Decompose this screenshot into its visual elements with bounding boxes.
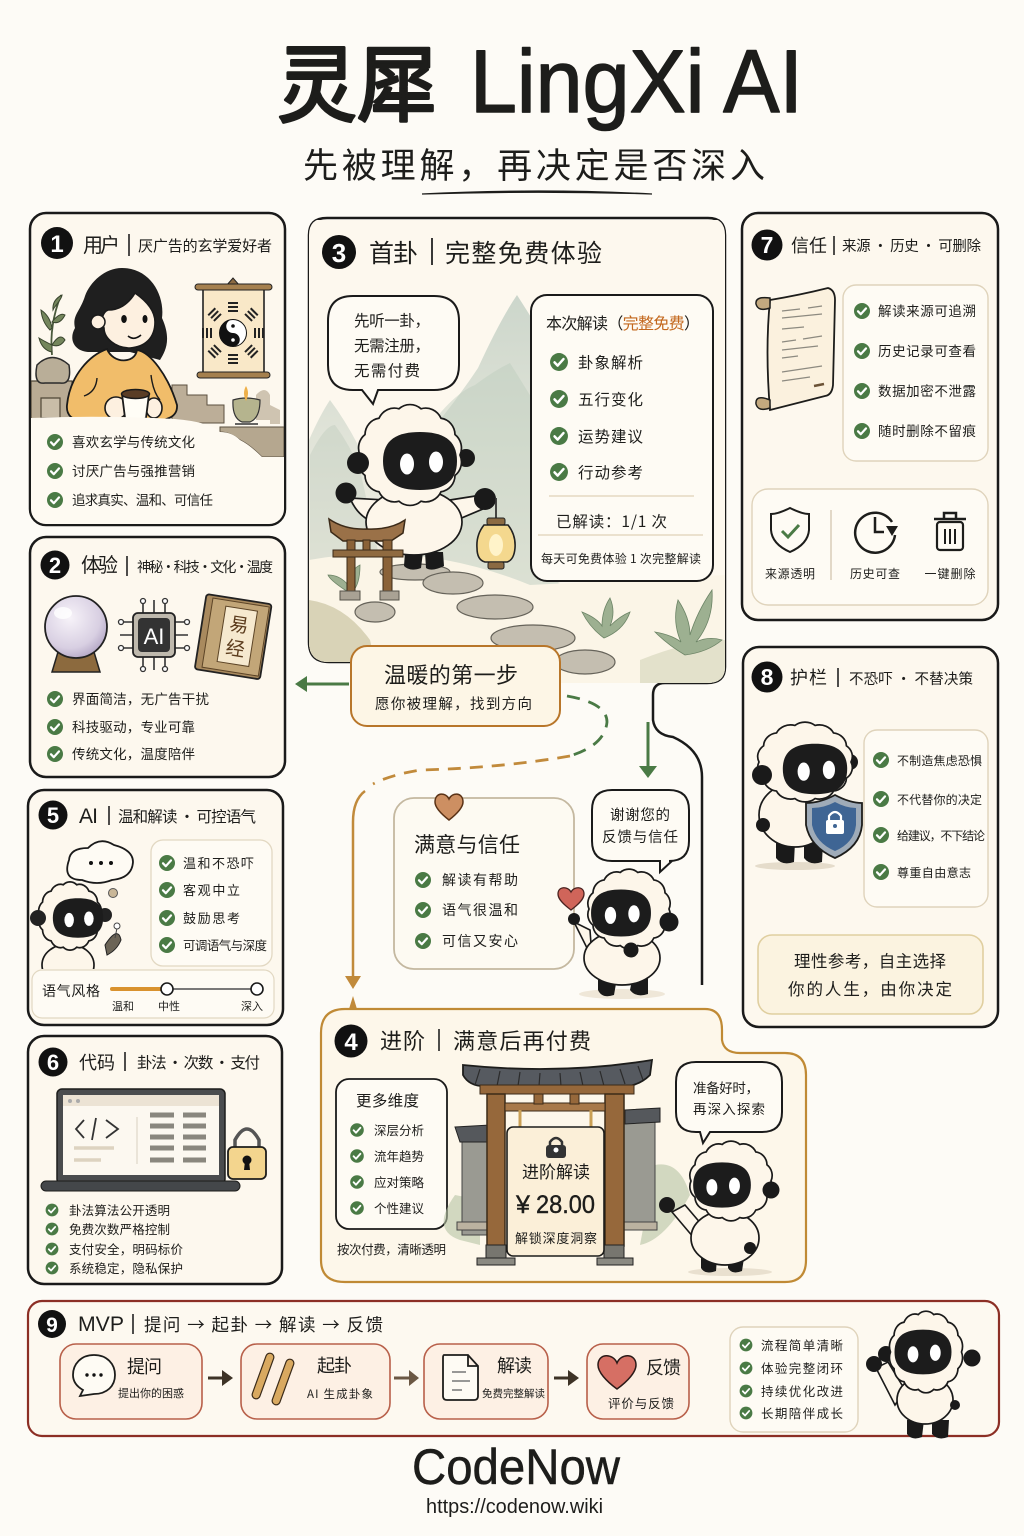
heading: panel 3 (322, 234, 602, 270)
heading: panel 1 (41, 227, 272, 259)
box: tone list: 温和不恐吓 (183, 853, 254, 872)
info panel: this reading: 卦象解析 (578, 351, 643, 373)
list: code: 免费次数严格控制 (69, 1219, 170, 1238)
title: 灵犀 (277, 19, 437, 140)
scene: mountains and stones (309, 220, 725, 683)
heading: panel 3: 首卦 (369, 234, 418, 270)
speech bubble (328, 296, 459, 404)
icon: document scroll (756, 288, 835, 410)
heading: panel 6: 卦法 · 次数 · 支付 (137, 1051, 260, 1073)
lantern (477, 498, 515, 569)
step: ask (60, 1344, 202, 1419)
heading: panel 7: 7 (761, 232, 773, 258)
step: read: 解读 (497, 1352, 532, 1378)
heading: panel 2: 2 (49, 553, 61, 578)
sweater (67, 349, 177, 421)
illustration: gate with price sign: ¥ (515, 1191, 530, 1219)
box: tone list: 鼓励思考 (183, 908, 240, 927)
box: guardrail list: 不代替你的决定 (897, 791, 982, 808)
heading: panel 8: 不恐吓 · 不替决策 (849, 668, 974, 689)
box: trust list (843, 285, 988, 461)
speech bubble: thanks (592, 790, 689, 872)
list: user traits: 追求真实、温和、可信任 (72, 489, 213, 509)
sheep mascot waving (659, 1141, 780, 1276)
box: MVP checklist (730, 1327, 858, 1432)
illustration: woman with tea (31, 268, 284, 525)
heading: panel 4: 进阶 (380, 1024, 425, 1056)
icon: yi jing book: 易 (228, 609, 251, 639)
box: tone list (151, 840, 272, 966)
step: divine (241, 1344, 390, 1419)
box: more dimensions: 流年趋势 (374, 1146, 424, 1165)
tone slider: 温和 (112, 998, 134, 1014)
heading: panel 2: 神秘·科技·文化·温度 (137, 557, 273, 577)
icon: AI chip (118, 598, 190, 672)
heading: panel 1: 用户 (83, 229, 120, 258)
panel 4: advanced (321, 1009, 806, 1282)
step: feedback: 评价与反馈 (608, 1393, 674, 1412)
footer brand (412, 1439, 621, 1518)
list: satisfaction: 解读有帮助 (442, 870, 518, 890)
list: experience: 传统文化，温度陪伴 (72, 743, 195, 763)
icon: trash (934, 513, 966, 550)
list: code: 卦法算法公开透明 (69, 1200, 170, 1219)
arrow: to panel 4 (345, 791, 365, 1009)
bagua scroll (195, 278, 272, 378)
heading: panel 1: 厌广告的玄学爱好者 (138, 235, 272, 256)
box: trust icons: 来源透明 (765, 565, 815, 582)
list: code: 系统稳定，隐私保护 (69, 1258, 183, 1277)
title: LingXi AI (470, 31, 803, 131)
panel 3: first reading (309, 218, 725, 985)
heading: panel 6: 6 (47, 1050, 59, 1075)
callout: warm first step: 愿你被理解，找到方向 (375, 693, 532, 714)
box: guardrail list: 不制造焦虑恐惧 (897, 752, 982, 769)
step: feedback: 反馈 (646, 1354, 681, 1380)
list: code (46, 1200, 183, 1277)
sheep mascot waving (866, 1311, 980, 1438)
tone slider: 深入 (241, 998, 263, 1014)
icon: laptop (41, 1089, 240, 1191)
step: divine: 起卦 (317, 1352, 352, 1378)
heading: panel 5: 5 (47, 803, 59, 828)
box: MVP checklist: 体验完整闭环 (761, 1358, 843, 1377)
icon: thought cloud (67, 841, 133, 898)
info panel: this reading: 每天可免费体验 1 次完整解读 (541, 550, 701, 567)
heading: panel 5: 温和解读 · 可控语气 (118, 805, 256, 827)
box: tone list: 可调语气与深度 (183, 935, 267, 954)
icon: blue shield (806, 795, 862, 858)
list: experience: 界面简洁，无广告干扰 (72, 688, 210, 708)
list: user traits (47, 431, 213, 509)
illustration: gate with price sign: 进阶解读 (522, 1158, 590, 1183)
panel 8: guardrails (743, 647, 998, 1027)
list: experience (47, 688, 210, 763)
box: trust icons: 一键删除 (924, 565, 976, 582)
plants (328, 565, 722, 655)
box: guardrail list (864, 730, 988, 907)
small torii gate (329, 519, 405, 600)
icon: heart (435, 794, 463, 820)
heading: panel 6: 代码 (79, 1049, 115, 1075)
heading: panel 7: 信任 (791, 232, 827, 258)
speech bubble: 无需注册， (354, 334, 430, 356)
box: trust list: 随时删除不留痕 (878, 420, 976, 440)
step: ask: 提出你的困惑 (118, 1385, 184, 1401)
speech bubble: ready: 准备好时， (693, 1077, 759, 1097)
panel 5: AI tone (28, 790, 283, 1025)
hair (72, 268, 167, 360)
heading: panel 3: 3 (332, 238, 346, 268)
panel 2: experience (30, 537, 285, 777)
list: user traits: 讨厌广告与强推营销 (72, 460, 195, 480)
info panel: this reading: 运势建议 (578, 425, 643, 447)
heading: satisfaction: 满意与信任 (414, 829, 520, 859)
candle (233, 386, 260, 424)
icon: padlock (228, 1129, 266, 1179)
footer brand: https://codenow.wiki (426, 1496, 603, 1518)
step: ask: 提问 (127, 1353, 162, 1379)
box: MVP checklist: 持续优化改进 (761, 1381, 843, 1400)
sheep mascot thinking (30, 881, 122, 969)
heading: panel 7: 来源 · 历史 · 可删除 (842, 235, 982, 256)
heading: panel 9 (38, 1310, 383, 1338)
subtitle: 先被理解，再决定是否深入 (303, 138, 765, 189)
icon: shield (771, 508, 809, 552)
heading: panel 9: 提问 → 起卦 → 解读 → 反馈 (144, 1312, 383, 1337)
footer brand: CodeNow (412, 1439, 621, 1495)
panel 9: MVP flow (28, 1301, 999, 1438)
speech bubble: ready: 再深入探索 (693, 1098, 765, 1118)
step: read: 免费完整解读 (482, 1386, 546, 1401)
arrow (208, 1370, 233, 1386)
callout: rational reference: 理性参考，自主选择 (794, 948, 946, 972)
panel: satisfaction and trust (394, 794, 574, 969)
arrow (554, 1370, 579, 1386)
panel 6: code (28, 1036, 282, 1284)
dashed path (373, 696, 607, 784)
speech bubble: 先听一卦， (354, 309, 430, 331)
panel 7: trust (742, 213, 998, 620)
sheep mascot with shield (752, 722, 858, 870)
plant (36, 295, 70, 383)
heading: panel 8: 8 (761, 664, 774, 690)
callout: warm first step (351, 646, 560, 726)
panel 1: user (30, 213, 285, 525)
heading: panel 8: 护栏 (790, 664, 827, 690)
list: user traits: 喜欢玄学与传统文化 (72, 431, 195, 451)
box: trust list: 历史记录可查看 (878, 340, 976, 360)
heading: panel 9: MVP (78, 1313, 124, 1336)
heading: panel 9: 9 (46, 1314, 58, 1337)
heading: panel 6 (38, 1048, 260, 1076)
info panel: this reading (531, 295, 713, 581)
box: more dimensions: 更多维度 (356, 1089, 419, 1111)
heading: panel 4: 4 (344, 1029, 358, 1056)
box: MVP checklist: 长期陪伴成长 (761, 1403, 843, 1422)
heading: panel 7 (752, 230, 982, 260)
list: satisfaction (415, 870, 518, 951)
note: pay per use: 按次付费，清晰透明 (337, 1239, 446, 1258)
list: code: 支付安全，明码标价 (69, 1239, 183, 1258)
arrow: to satisfaction (639, 722, 657, 778)
box: guardrail list: 尊重自由意志 (897, 864, 971, 881)
box: more dimensions (336, 1079, 447, 1229)
sheep mascot with lantern (336, 405, 496, 570)
icon: clock (855, 513, 898, 553)
speech bubble: ready (676, 1062, 782, 1143)
box: tone list: 客观中立 (183, 880, 240, 899)
callout: rational reference: 你的人生，由你决定 (788, 976, 952, 1000)
stepping stones (355, 564, 615, 674)
heading: panel 1: 1 (50, 231, 64, 258)
title (277, 19, 803, 140)
illustration: gate with price sign: 28.00 (536, 1191, 595, 1219)
heading: panel 3: 完整免费体验 (445, 234, 602, 270)
icon: AI chip: AI (144, 624, 164, 649)
speech bubble: thanks: 反馈与信任 (602, 826, 678, 847)
step: feedback (587, 1344, 689, 1419)
info panel: this reading: 本次解读（完整免费） (546, 310, 700, 334)
heading: panel 5: AI (79, 805, 98, 828)
speech bubble: 无需付费 (354, 359, 420, 381)
box: more dimensions: 个性建议 (374, 1198, 424, 1217)
sheep mascot with heart (558, 869, 678, 999)
info panel: this reading: 行动参考 (578, 461, 643, 483)
arrow: to panel 2 (295, 676, 349, 692)
icon: red heart (558, 888, 584, 910)
heading: panel 2 (40, 549, 273, 580)
list: satisfaction: 可信又安心 (442, 931, 518, 951)
box: guardrail list: 给建议，不下结论 (897, 827, 985, 844)
box: more dimensions: 应对策略 (374, 1172, 424, 1191)
icon: crystal ball (45, 596, 107, 672)
box: trust list: 解读来源可追溯 (878, 300, 976, 320)
box: trust icons: 历史可查 (850, 565, 900, 582)
tone slider (32, 970, 274, 1018)
heading: panel 4 (334, 1024, 591, 1058)
step: read (424, 1344, 548, 1419)
box: MVP checklist: 流程简单清晰 (761, 1335, 843, 1354)
speech bubble: thanks: 谢谢您的 (610, 804, 670, 825)
illustration: gate with price sign (444, 1060, 690, 1265)
arrow (394, 1370, 419, 1386)
info panel: this reading: 已解读：1/1 次 (556, 510, 667, 532)
heading: panel 4: 满意后再付费 (453, 1024, 591, 1056)
icon: lock (546, 1138, 566, 1158)
tone slider: 语气风格 (42, 981, 100, 1001)
step: divine: AI 生成卦象 (307, 1386, 373, 1402)
face (102, 293, 155, 348)
heading: panel 5 (38, 800, 256, 830)
list: satisfaction: 语气很温和 (442, 900, 518, 920)
list: experience: 科技驱动，专业可靠 (72, 716, 195, 736)
tone slider: 中性 (158, 998, 180, 1014)
icon: yi jing book: 经 (224, 633, 247, 663)
box: more dimensions: 深层分析 (374, 1120, 424, 1139)
box: trust list: 数据加密不泄露 (878, 380, 976, 400)
callout: rational reference (758, 935, 983, 1014)
heading: panel 8 (752, 662, 974, 692)
heading: panel 2: 体验 (81, 549, 118, 578)
icon: yi jing book (195, 594, 272, 679)
callout: warm first step: 温暖的第一步 (384, 658, 518, 690)
illustration: gate with price sign: 解锁深度洞察 (515, 1228, 597, 1247)
info panel: this reading: 五行变化 (578, 388, 643, 410)
box: trust icons (752, 489, 988, 605)
mug (122, 394, 149, 421)
